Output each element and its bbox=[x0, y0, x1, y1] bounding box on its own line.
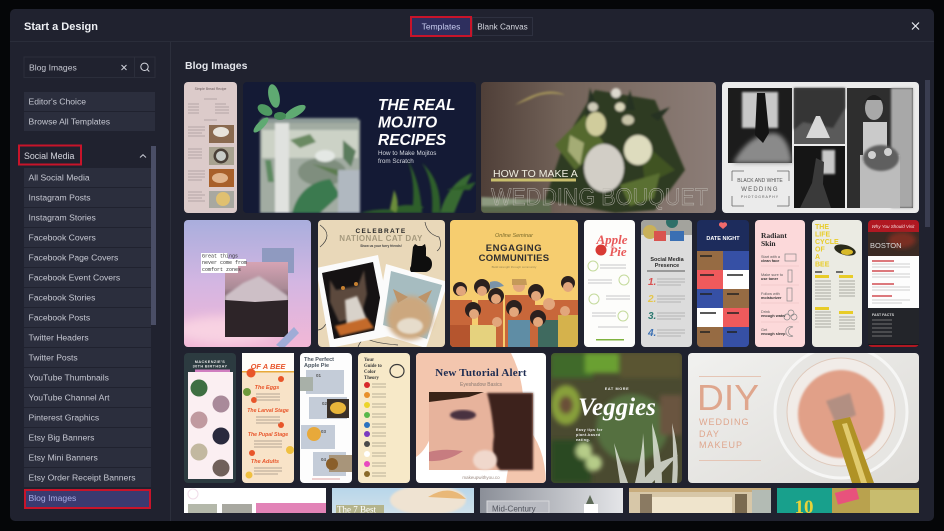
decorative plants bbox=[360, 161, 476, 213]
heading: Social Media: Social Media bbox=[24, 151, 74, 161]
template: national cat day: CELEBRATE bbox=[356, 228, 406, 235]
template: of a bee: The Larval Stage bbox=[247, 408, 289, 414]
template: eat more veggies: Easy tips for bbox=[576, 428, 603, 432]
template: life cycle of a bee: THE bbox=[815, 224, 829, 231]
template: perfect apple pie: Apple Pie bbox=[304, 363, 329, 369]
template: new tutorial alert: makeupwithyou.co bbox=[462, 475, 500, 480]
menu: social media categories: Instagram Posts bbox=[28, 192, 91, 202]
template: radiant skin: Drink bbox=[761, 310, 770, 314]
photo: bride with bouquet bbox=[847, 88, 913, 208]
template: boston: BOSTON bbox=[870, 241, 902, 250]
template: guide to color theory: Color bbox=[364, 370, 377, 375]
template: black and white wedding bbox=[722, 82, 919, 213]
menu: social media categories: Instagram Stories bbox=[28, 212, 96, 222]
template: black and white wedding: WEDDING bbox=[741, 187, 779, 193]
menu: top links: Editor's Choice bbox=[28, 96, 86, 106]
template: radiant skin: Skin bbox=[761, 239, 776, 248]
bottom row: partially visible templates: 10 bbox=[794, 497, 814, 518]
template: radiant skin: Make sure to bbox=[761, 273, 783, 277]
template: eat more veggies: Veggies bbox=[578, 394, 656, 421]
template: national cat day bbox=[316, 220, 448, 348]
template: perfect apple pie: The Perfect bbox=[304, 357, 334, 363]
template: engaging communities: COMMUNITIES bbox=[479, 253, 549, 264]
template: life cycle of a bee: LIFE bbox=[815, 232, 830, 238]
template: perfect apple pie: 02 bbox=[322, 401, 328, 406]
template: diy wedding day makeup: DAY bbox=[699, 429, 720, 439]
tab: Templates: Templates bbox=[422, 22, 460, 32]
template: diy wedding day makeup: DIY bbox=[697, 377, 759, 418]
template: boston bbox=[868, 220, 919, 347]
template: new tutorial alert bbox=[416, 353, 546, 483]
template: social media presence: Social Media bbox=[650, 257, 685, 263]
template: mojito recipes: THE REAL bbox=[378, 97, 456, 114]
template: national cat day: NATIONAL CAT DAY bbox=[339, 234, 423, 243]
gallery heading: Blog Images bbox=[185, 60, 248, 72]
template: apple pie: Pie bbox=[609, 244, 627, 259]
template: national cat day: Show us your furry friends! bbox=[360, 244, 402, 248]
photo: bride silhouette bbox=[728, 88, 792, 163]
template: diy wedding day makeup: MAKEUP bbox=[699, 440, 743, 450]
template: comfort zones bbox=[175, 220, 311, 349]
template: social media presence: 3. bbox=[648, 311, 656, 322]
menu: social media categories: Facebook Event Covers bbox=[28, 272, 120, 282]
template: comfort zones: never come from bbox=[202, 260, 247, 266]
template: radiant skin: Radiant bbox=[761, 231, 787, 240]
selected category: Blog Images: Blog Images bbox=[28, 493, 76, 503]
sidebar scrollbar bbox=[151, 146, 156, 325]
template: radiant skin: moisturizer bbox=[761, 296, 782, 300]
menu: social media categories: Facebook Covers bbox=[28, 232, 96, 242]
template: radiant skin: enough sleep bbox=[761, 332, 786, 336]
template: comfort zones: comfort zones bbox=[202, 267, 241, 273]
template: engaging communities: Online Seminar bbox=[495, 233, 534, 239]
template: boston: FAST FACTS bbox=[872, 313, 895, 317]
template: mojito recipes: How to Make Mojitos bbox=[378, 150, 436, 157]
template: guide to color theory: Your bbox=[364, 358, 375, 363]
template: mojito recipes: RECIPES bbox=[378, 132, 447, 149]
template: 30th birthday bbox=[184, 353, 236, 483]
tab: Templates bbox=[411, 17, 471, 36]
template: new tutorial alert: New Tutorial Alert bbox=[435, 367, 527, 379]
menu: social media categories: Twitter Posts bbox=[28, 352, 78, 362]
template: perfect apple pie: 03 bbox=[321, 429, 327, 434]
template: eat more veggies bbox=[551, 353, 682, 483]
template: date night bbox=[697, 220, 749, 347]
template: diy wedding day makeup: WEDDING bbox=[699, 417, 750, 427]
template: radiant skin: use toner bbox=[761, 277, 779, 281]
template: of a bee: The Adults bbox=[251, 459, 279, 465]
template: wedding bouquet bbox=[481, 82, 716, 213]
menu: social media categories: Facebook Stories bbox=[28, 292, 95, 302]
menu: social media categories: Etsy Order Receipt Banners bbox=[28, 472, 136, 482]
menu: social media categories: Etsy Mini Banners bbox=[28, 452, 98, 462]
menu: top links bbox=[24, 92, 155, 131]
template: radiant skin: clean face bbox=[761, 259, 779, 263]
search box bbox=[24, 57, 155, 78]
template: social media presence: 2. bbox=[647, 294, 656, 305]
template: of a bee bbox=[242, 353, 294, 483]
template: guide to color theory bbox=[358, 353, 410, 483]
template: life cycle of a bee: CYCLE bbox=[815, 239, 839, 246]
template: black and white wedding: PHOTOGRAPHY bbox=[741, 195, 779, 199]
template: black and white wedding: BLACK AND WHITE bbox=[737, 178, 783, 184]
template: apple pie bbox=[584, 220, 635, 347]
template: radiant skin bbox=[755, 220, 805, 347]
template: engaging communities: Build strength through community bbox=[492, 265, 537, 269]
template: mojito recipes: MOJITO bbox=[378, 114, 437, 132]
template: new tutorial alert: Eyeshadow Basics bbox=[460, 382, 502, 388]
bottom row: partially visible templates bbox=[184, 485, 919, 518]
template: radiant skin: enough water bbox=[761, 314, 786, 318]
template: life cycle of a bee: BEE bbox=[815, 262, 830, 268]
menu: social media categories: All Social Media bbox=[28, 172, 90, 182]
menu: social media categories: Pinterest Graphics bbox=[28, 412, 99, 422]
photo: ginger cat bbox=[374, 264, 448, 348]
template: bread recipe: Simple Bread Recipe bbox=[195, 87, 227, 91]
template: life cycle of a bee: A bbox=[815, 254, 820, 261]
selected category: Blog Images bbox=[25, 490, 150, 508]
menu: top links: Browse All Templates bbox=[28, 116, 110, 126]
menu: social media categories: YouTube Channel Art bbox=[28, 392, 110, 402]
template: date night: DATE NIGHT bbox=[706, 236, 740, 242]
template: social media presence: 4. bbox=[647, 328, 656, 339]
template: perfect apple pie: 04 bbox=[321, 457, 327, 462]
template: perfect apple pie bbox=[300, 353, 352, 483]
template: eat more veggies: EAT MORE bbox=[605, 387, 629, 391]
photo: face bbox=[429, 392, 533, 470]
icon: close bbox=[912, 22, 919, 30]
template: social media presence bbox=[641, 216, 692, 347]
photo: bouquet bbox=[481, 88, 685, 213]
photo: mojito glass bbox=[251, 83, 476, 213]
template: bread recipe bbox=[184, 82, 237, 213]
template: guide to color theory: Guide to bbox=[364, 364, 382, 369]
template: 30th birthday: 30TH BIRTHDAY bbox=[193, 364, 227, 368]
illustration: crowd bbox=[450, 276, 578, 347]
search box: Blog Images bbox=[29, 62, 77, 72]
template: eat more veggies: eating. bbox=[576, 438, 590, 442]
menu: social media categories: Facebook Page Covers bbox=[28, 252, 118, 262]
gallery scrollbar bbox=[925, 80, 930, 227]
heading: Social Media bbox=[19, 146, 146, 164]
template: social media presence: Presence bbox=[655, 263, 679, 269]
template: social media presence: 1. bbox=[648, 277, 656, 288]
template: 30th birthday: MACKENZIE'S bbox=[195, 360, 225, 364]
bottom row: partially visible templates: The 7 Best bbox=[337, 504, 376, 514]
menu: social media categories: YouTube Thumbnails bbox=[28, 372, 109, 382]
template: guide to color theory: Theory bbox=[364, 376, 380, 381]
menu: social media categories: Facebook Posts bbox=[28, 312, 90, 322]
template: of a bee: OF A BEE bbox=[251, 362, 286, 371]
template: apple pie: Apple bbox=[595, 232, 628, 247]
photo: tabby kitten bbox=[318, 255, 388, 347]
template: wedding bouquet: WEDDING BOUQUET bbox=[491, 184, 708, 211]
template: eat more veggies: plant-based bbox=[576, 433, 601, 437]
template: life cycle of a bee bbox=[812, 220, 862, 347]
menu: social media categories bbox=[24, 168, 151, 487]
template: boston: Why You Should Visit bbox=[872, 224, 915, 229]
template: perfect apple pie: 01 bbox=[316, 373, 322, 378]
template: engaging communities: ENGAGING bbox=[486, 243, 542, 254]
template: radiant skin: Follow with bbox=[761, 292, 780, 296]
photo: bride in garden bbox=[794, 88, 845, 144]
menu: social media categories: Twitter Headers bbox=[28, 332, 89, 342]
template: mojito recipes: from Scratch bbox=[378, 158, 414, 165]
template: of a bee: The Eggs bbox=[255, 385, 279, 391]
template: comfort zones: Great things bbox=[202, 254, 238, 260]
photo: bride at window bbox=[794, 146, 845, 208]
template: diy wedding day makeup bbox=[688, 346, 919, 483]
template: of a bee: The Pupal Stage bbox=[248, 432, 288, 438]
tab: Blank Canvas bbox=[472, 18, 532, 36]
template: radiant skin: Get bbox=[761, 328, 768, 332]
modal title: Start a Design bbox=[24, 21, 98, 33]
menu: social media categories: Etsy Big Banners bbox=[28, 432, 94, 442]
template: life cycle of a bee: OF bbox=[815, 246, 825, 254]
photo: powder and brush bbox=[775, 346, 907, 483]
photo: vegetables bbox=[551, 353, 682, 483]
template: engaging communities bbox=[450, 220, 578, 347]
template: wedding bouquet: HOW TO MAKE A bbox=[493, 168, 578, 180]
bottom row: partially visible templates: Mid-Century bbox=[492, 504, 536, 514]
template: radiant skin: Start with a bbox=[761, 255, 781, 259]
tab: Blank Canvas: Blank Canvas bbox=[477, 22, 528, 32]
icon: black cat bbox=[410, 244, 432, 272]
template: mojito recipes bbox=[243, 82, 476, 213]
